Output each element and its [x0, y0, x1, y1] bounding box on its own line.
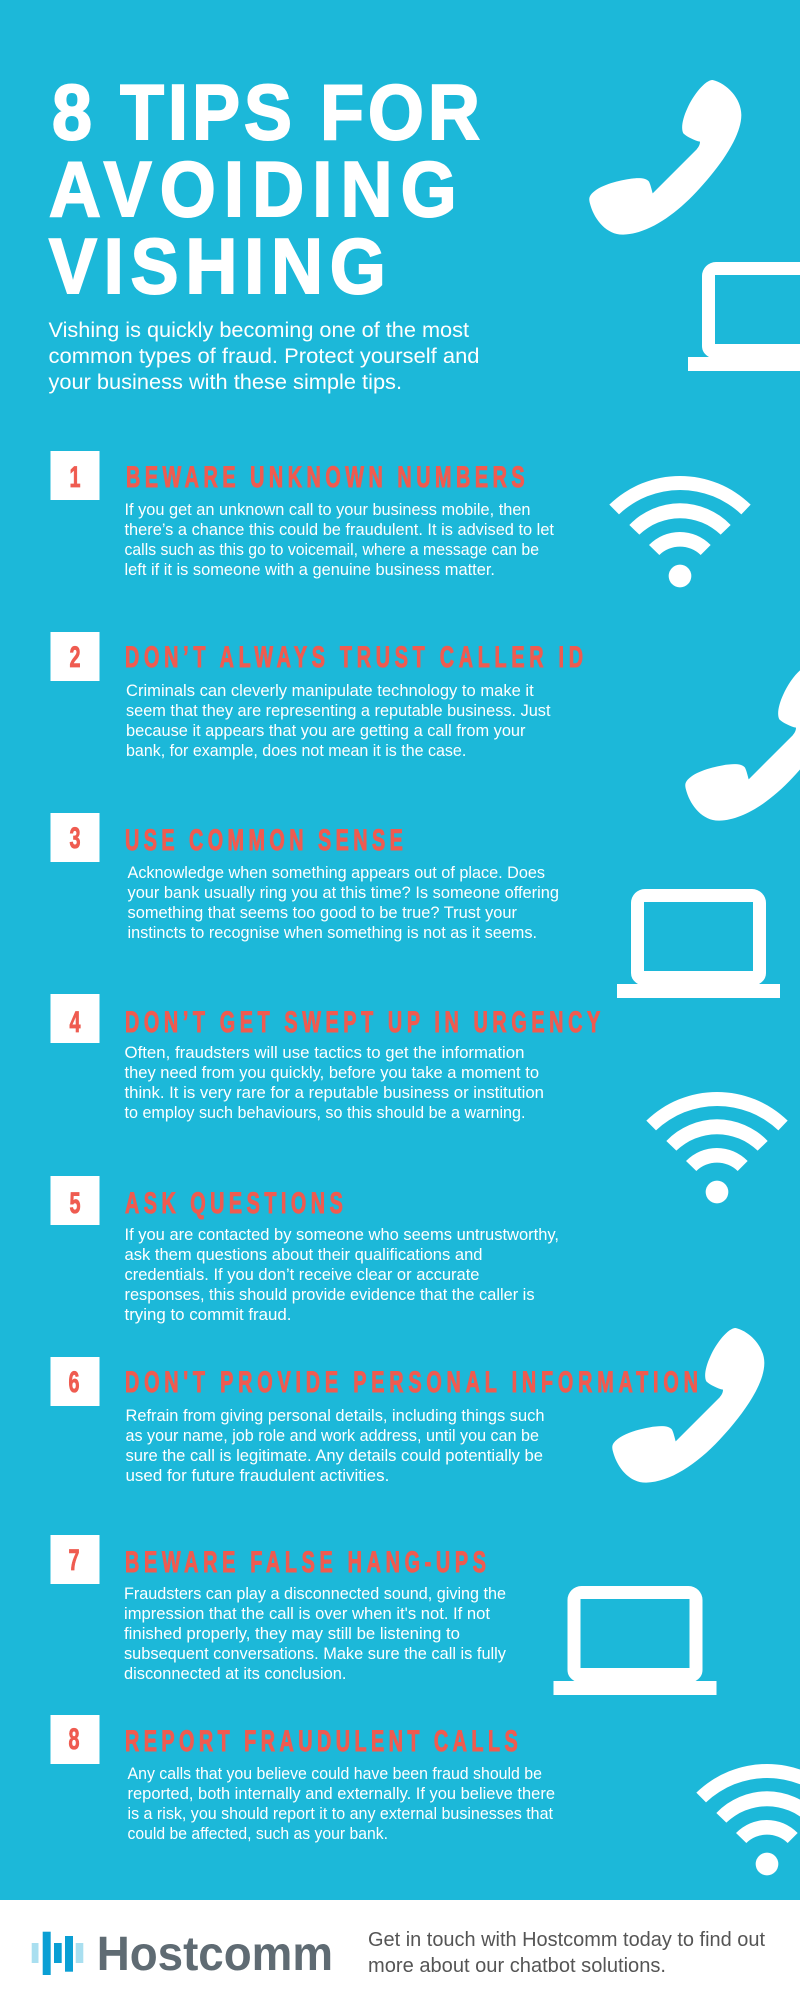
logo wordmark: Hostcomm	[97, 1928, 333, 1981]
body 4: they need from you quickly, before you take a moment to	[124, 1064, 539, 1082]
number box 3: 3	[69, 822, 81, 855]
number box 5	[50, 1176, 100, 1225]
heading 7: BEWARE FALSE HANG-UPS	[125, 1546, 486, 1579]
body 1: calls such as this go to voicemail, where a message can be	[124, 541, 539, 559]
body 5	[124, 1226, 559, 1324]
body 7: disconnected at its conclusion.	[124, 1665, 346, 1683]
number box 3	[50, 813, 100, 862]
body 5: If you are contacted by someone who seems untrustworthy,	[124, 1226, 559, 1244]
icon: laptop top	[688, 262, 800, 371]
number box 4	[50, 994, 100, 1043]
body 8: Any calls that you believe could have been fraud should be	[128, 1765, 542, 1783]
heading 8: REPORT FRAUDULENT CALLS	[125, 1725, 518, 1758]
body 8	[128, 1765, 555, 1843]
tip 2	[50, 632, 583, 760]
icon: phone 2	[685, 666, 800, 821]
title: AVOIDING	[49, 145, 457, 233]
body 8: could be affected, such as your bank.	[128, 1825, 388, 1843]
body 7: impression that the call is over when it's not. If not	[124, 1605, 490, 1623]
body 1: left if it is someone with a genuine business matter.	[124, 561, 495, 579]
body 7	[124, 1585, 507, 1683]
body 5: trying to commit fraud.	[124, 1306, 292, 1324]
body 8: is a risk, you should report it to any external businesses that	[128, 1805, 553, 1823]
body 6	[126, 1407, 544, 1485]
number box 5: 5	[69, 1187, 81, 1220]
footer text: Get in touch with Hostcomm today to find out	[368, 1929, 765, 1951]
number box 2	[50, 632, 100, 681]
title: VISHING	[49, 222, 386, 310]
footer text	[368, 1929, 765, 1977]
body 7: subsequent conversations. Make sure the call is fully	[124, 1645, 507, 1663]
heading 6: DON'T PROVIDE PERSONAL INFORMATION	[125, 1366, 698, 1399]
body 2: because it appears that you are getting a call from your	[126, 722, 526, 740]
body 5: ask them questions about their qualifications and	[124, 1246, 482, 1264]
icon: phone top	[589, 80, 741, 235]
tip 5	[50, 1176, 559, 1324]
tip 6	[50, 1357, 698, 1485]
body 4: to employ such behaviours, so this should be a warning.	[124, 1104, 526, 1122]
body 6: as your name, job role and work address, until you can be	[126, 1427, 539, 1445]
number box 6: 6	[68, 1366, 80, 1399]
intro text: your business with these simple tips.	[48, 370, 402, 394]
tip 1	[50, 451, 554, 579]
heading 3: USE COMMON SENSE	[125, 824, 403, 857]
body 5: credentials. If you don’t receive clear or accurate	[124, 1266, 480, 1284]
body 4: Often, fraudsters will use tactics to get the information	[124, 1044, 524, 1062]
tip 4	[50, 994, 600, 1122]
body 1	[124, 501, 554, 579]
tip 7	[50, 1535, 507, 1683]
body 8: reported, both internally and externally. If you believe there	[128, 1785, 555, 1803]
body 4	[124, 1044, 544, 1122]
footer	[0, 1900, 800, 2000]
icon: laptop 2	[617, 889, 780, 998]
intro text: common types of fraud. Protect yourself and	[48, 344, 479, 368]
number box 1: 1	[69, 461, 81, 494]
icon: wifi 1	[609, 476, 751, 587]
number box 6	[50, 1357, 100, 1406]
heading 4: DON’T GET SWEPT UP IN URGENCY	[125, 1006, 600, 1039]
icon: wifi 2	[646, 1092, 788, 1203]
body 2	[126, 682, 551, 760]
body 1: there’s a chance this could be fraudulent. It is advised to let	[124, 521, 554, 539]
heading 2: DON’T ALWAYS TRUST CALLER ID	[125, 641, 583, 674]
body 3: Acknowledge when something appears out of place. Does	[128, 864, 545, 882]
number box 4: 4	[69, 1006, 81, 1039]
icon: wifi 3	[696, 1764, 800, 1875]
body 7: finished properly, they may still be listening to	[124, 1625, 460, 1643]
number box 7	[50, 1535, 100, 1584]
body 2: bank, for example, does not mean it is the case.	[126, 742, 466, 760]
number box 2: 2	[69, 641, 81, 674]
icon: phone 3	[612, 1328, 764, 1483]
number box 7: 7	[68, 1544, 80, 1577]
body 6: sure the call is legitimate. Any details could potentially be	[126, 1447, 543, 1465]
body 3	[128, 864, 559, 942]
body 3: your bank usually ring you at this time? Is someone offering	[128, 884, 559, 902]
footer text: more about our chatbot solutions.	[368, 1955, 666, 1977]
title	[49, 68, 480, 310]
logo mark	[32, 1932, 83, 1975]
number box 8: 8	[68, 1723, 80, 1756]
body 3: something that seems too good to be true? Trust your	[128, 904, 517, 922]
intro text: Vishing is quickly becoming one of the most	[48, 318, 469, 342]
title: 8 TIPS FOR	[52, 68, 480, 156]
body 6: Refrain from giving personal details, including things such	[126, 1407, 544, 1425]
heading 1: BEWARE UNKNOWN NUMBERS	[126, 461, 525, 494]
body 1: If you get an unknown call to your business mobile, then	[124, 501, 530, 519]
number box 8	[50, 1715, 100, 1764]
body 2: Criminals can cleverly manipulate technology to make it	[126, 682, 534, 700]
icon: laptop 3	[554, 1586, 716, 1695]
body 6: used for future fraudulent activities.	[126, 1467, 389, 1485]
intro text	[48, 318, 479, 394]
number box 1	[50, 451, 100, 500]
body 3: instincts to recognise when something is not as it seems.	[128, 924, 537, 942]
body 2: seem that they are representing a reputable business. Just	[126, 702, 551, 720]
body 7: Fraudsters can play a disconnected sound, giving the	[124, 1585, 506, 1603]
heading 5: ASK QUESTIONS	[125, 1187, 343, 1220]
tip 8	[50, 1715, 555, 1843]
tip 3	[50, 813, 559, 942]
body 4: think. It is very rare for a reputable business or institution	[124, 1084, 544, 1102]
body 5: responses, this should provide evidence that the caller is	[124, 1286, 534, 1304]
